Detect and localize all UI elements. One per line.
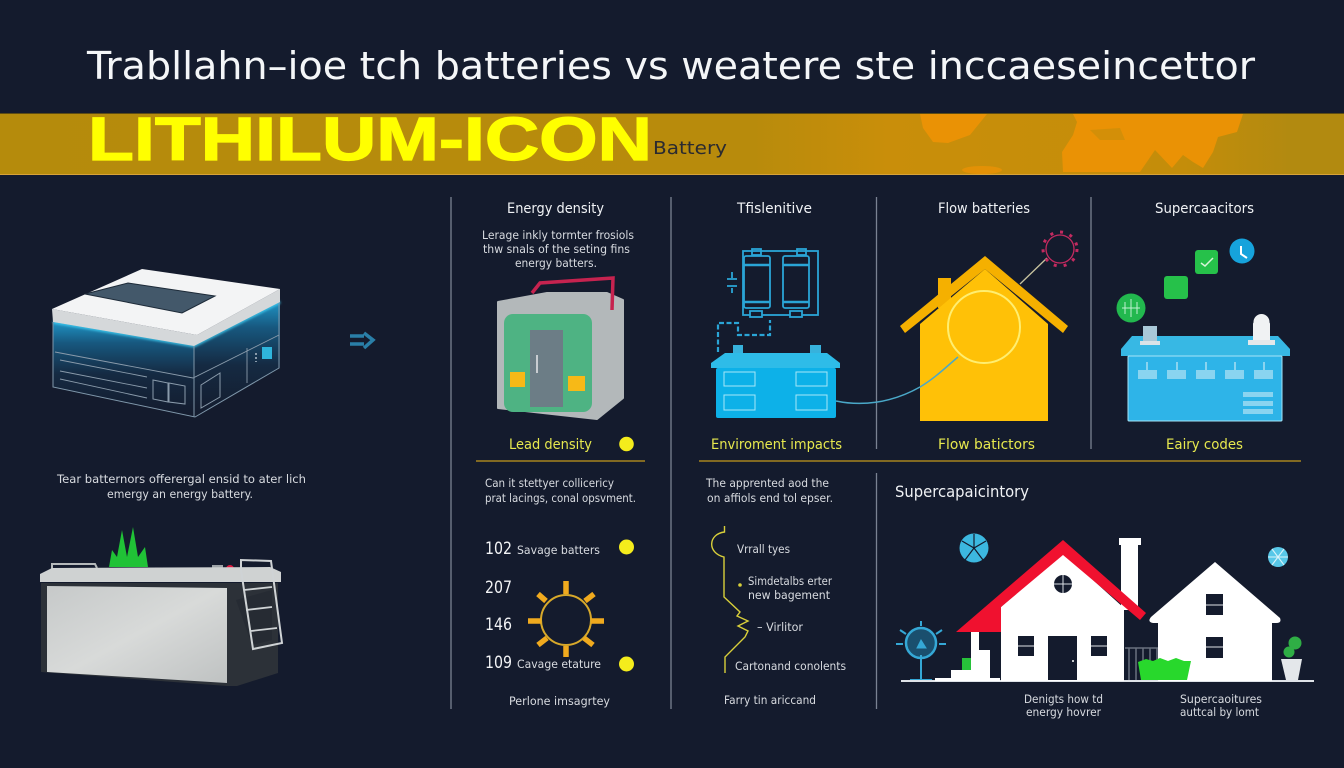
left description text: Tear batternors offerergal ensid to ater lich: [56, 472, 306, 486]
text block: Lerage inkly tormter frosiols: [482, 228, 634, 242]
icon: green bush: [1138, 658, 1191, 680]
left description text: emergy an energy battery.: [107, 487, 253, 501]
stat 109: Cavage etature: [517, 657, 601, 671]
wire: [836, 357, 958, 403]
text block: prat lacings, conal opsvment.: [485, 491, 636, 505]
icon: blue battery: [711, 345, 840, 418]
icon: wind turbine: [896, 621, 946, 680]
stat 102: 102: [485, 539, 512, 558]
icon: small fan: [1268, 547, 1288, 567]
note 4: Cartonand conolents: [735, 659, 846, 673]
text block: [485, 476, 636, 505]
panel: capacity figures: [485, 476, 636, 708]
icon: lithium battery module: [52, 269, 280, 417]
panel: circuit notes: [705, 476, 846, 707]
panel: supercapacitory homes: [895, 482, 1314, 719]
heading: Tfislenitive: [736, 201, 812, 217]
heading: Energy density: [507, 201, 604, 217]
banner sublabel: Battery: [653, 138, 727, 159]
arrow: [350, 333, 373, 348]
panel: energy density: [482, 201, 634, 453]
heading: Supercapaicintory: [895, 482, 1029, 501]
icon: yellow house: [900, 232, 1077, 421]
ground line: [901, 680, 1314, 682]
label: Flow batictors: [938, 437, 1035, 453]
note 3: – Virlitor: [757, 620, 803, 634]
icon: second house: [1149, 562, 1280, 681]
label: Enviroment impacts: [711, 437, 842, 453]
banner heading: LITHILUM-ICON: [88, 105, 652, 173]
text block: The apprented aod the: [705, 476, 829, 490]
gold rules: [476, 460, 1301, 462]
caption right: Supercaoitures: [1180, 692, 1262, 706]
heading: Flow batteries: [938, 201, 1030, 217]
caption left: [1024, 692, 1103, 719]
left description text: [56, 472, 306, 501]
icon: circuit with cells: [718, 249, 818, 352]
note 2: [738, 574, 832, 602]
status dot: [619, 437, 634, 451]
text block: on affiols end tol epser.: [707, 491, 833, 505]
icon: battery: [1121, 314, 1290, 421]
label: Eairy codes: [1166, 437, 1243, 453]
column dividers: [451, 197, 1091, 709]
caption: Farry tin ariccand: [724, 693, 816, 707]
icon: potted plant: [1281, 636, 1302, 680]
note 2: new bagement: [748, 588, 830, 602]
text block: thw snals of the seting fins: [483, 242, 630, 256]
caption: Perlone imsagrtey: [509, 694, 610, 708]
text block: [705, 476, 833, 505]
heading: Supercaacitors: [1155, 201, 1254, 217]
panel: supercapacitors: [1116, 201, 1290, 453]
diagram: circuit line: [712, 526, 748, 673]
caption left: energy hovrer: [1026, 705, 1101, 719]
caption right: auttcal by lomt: [1180, 705, 1259, 719]
caption right: [1180, 692, 1262, 719]
title: Trabllahn–ioe tch batteries vs weatere ste inccaeseincettor: [86, 44, 1255, 88]
icon: blue fan: [960, 534, 988, 562]
icon: floating badges: [1116, 238, 1254, 322]
panel: flow batteries: [836, 201, 1077, 453]
icon: main house: [935, 538, 1146, 681]
stat 207: 207: [485, 578, 512, 597]
label: Lead density: [509, 437, 592, 453]
text block: Can it stettyer collicericy: [485, 476, 614, 490]
caption left: Denigts how td: [1024, 692, 1103, 706]
stat 109: [485, 653, 634, 672]
note 2: Simdetalbs erter: [748, 574, 832, 588]
stat 102: Savage batters: [517, 543, 600, 557]
stat 109: 109: [485, 653, 512, 672]
stat 146: 146: [485, 615, 512, 634]
banner: [0, 105, 1344, 175]
text block: energy batters.: [515, 256, 597, 270]
note 1: Vrrall tyes: [737, 542, 790, 556]
icon: lead-acid battery: [40, 527, 282, 686]
icon: sun: [528, 581, 604, 657]
icon: grey battery: [498, 278, 623, 419]
fence: [1125, 648, 1158, 680]
stat 102: [485, 539, 634, 558]
text block: [482, 228, 634, 270]
panel: environmental circuit: [711, 201, 842, 453]
